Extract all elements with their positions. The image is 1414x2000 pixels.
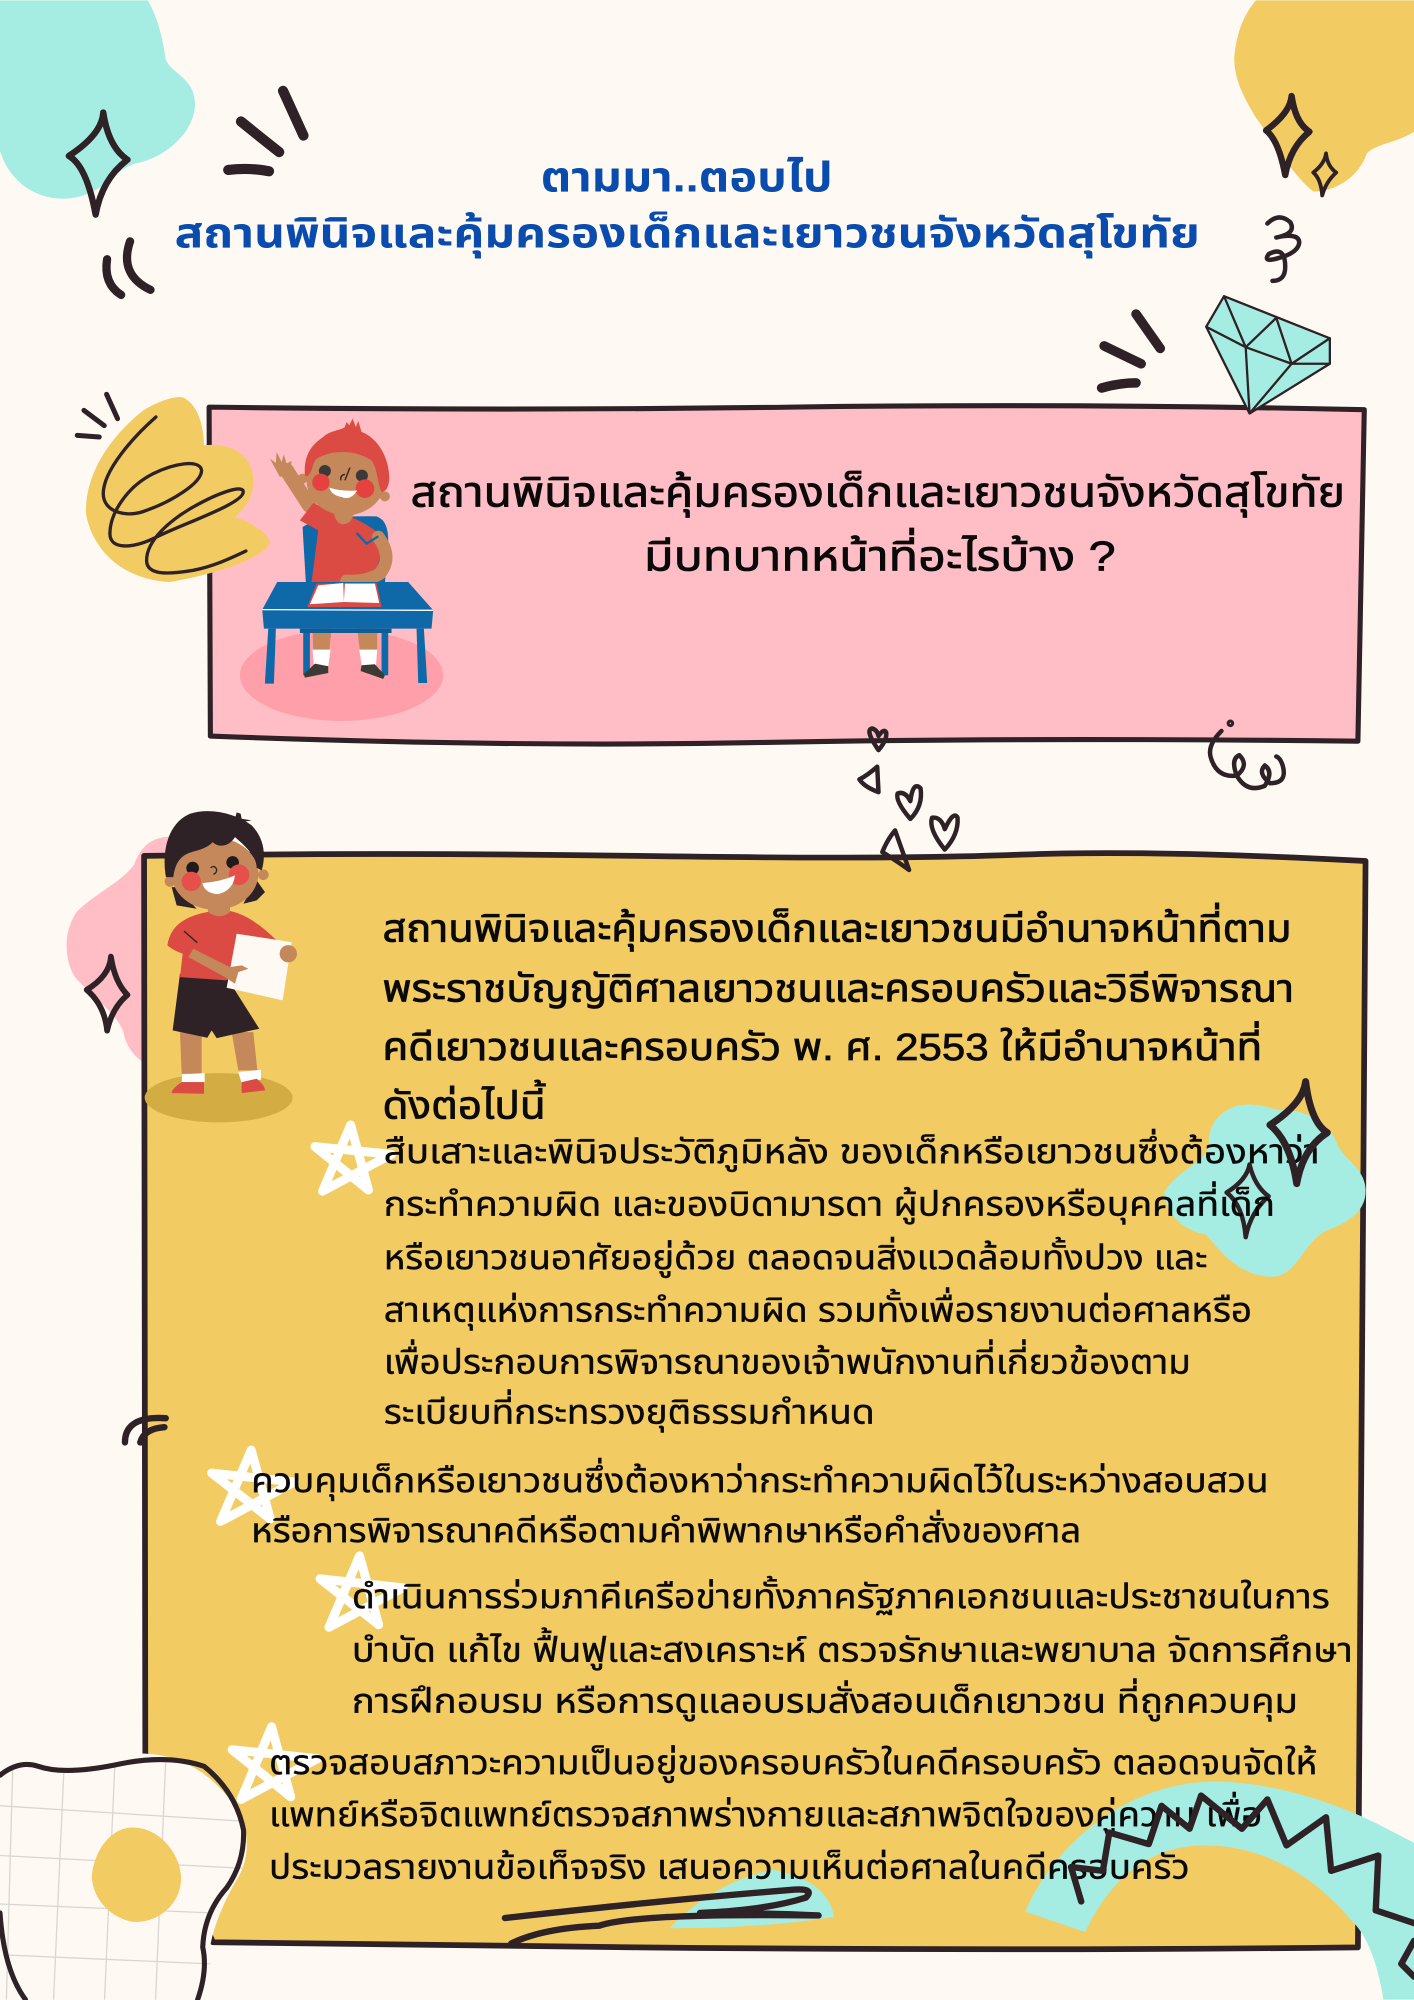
stars	[212, 1125, 403, 1799]
blob: yellow with scribble	[77, 394, 270, 582]
icon: sparkle top-left	[69, 113, 128, 215]
text block: duty 4	[269, 1744, 1317, 1886]
illustration: boy with paper	[145, 811, 297, 1122]
blob: teal in panel right	[1164, 1105, 1366, 1277]
text block: duty 4: แพทย์หรือจิตแพทย์ตรวจสภาพร่างกายและสภาพจิตใจของคู่ความ เพื่อ	[269, 1791, 1262, 1835]
text block: intro: ดังต่อไปนี้	[383, 1080, 546, 1128]
blob: yellow top-right	[1234, 0, 1414, 192]
panel: duties	[144, 853, 1366, 1949]
icon: curved marks left	[106, 241, 150, 295]
text block: duty 1	[384, 1128, 1320, 1432]
icon: curl under pink panel	[1210, 722, 1284, 788]
text block: duty 4: ประมวลรายงานข้อเท็จจริง เสนอความเห็นต่อศาลในคดีครอบครัว	[269, 1848, 1190, 1886]
icon: tick marks near diamond	[1102, 314, 1160, 388]
text block: duty 2	[251, 1457, 1269, 1550]
icon: hearts	[859, 728, 958, 870]
heading: question text	[411, 469, 1345, 579]
text block: duty 1: สืบเสาะและพินิจประวัติภูมิหลัง ของเด็กหรือเยาวชนซึ่งต้องหาว่า	[384, 1128, 1320, 1172]
illustration: boy at desk	[240, 419, 443, 721]
heading: question text: มีบทบาทหน้าที่อะไรบ้าง ?	[644, 527, 1116, 579]
heading: question text: สถานพินิจและคุ้มครองเด็กและเยาวชนจังหวัดสุโขทัย	[411, 469, 1345, 518]
text block: duty 3: บำบัด แก้ไข ฟื้นฟูและสงเคราะห์ ตรวจรักษาและพยาบาล จัดการศึกษา	[352, 1627, 1353, 1671]
text block: duty 1: สาเหตุแห่งการกระทำความผิด รวมทั้งเพื่อรายงานต่อศาลหรือ	[384, 1286, 1252, 1330]
text block: intro: สถานพินิจและคุ้มครองเด็กและเยาวชนมีอำนาจหน้าที่ตาม	[383, 902, 1292, 951]
text block: duty 1: ระเบียบที่กระทรวงยุติธรรมกำหนด	[384, 1388, 875, 1432]
text block: intro: คดีเยาวชนและครอบครัว พ. ศ. 2553 ให้มีอำนาจหน้าที่	[383, 1021, 1262, 1069]
text block: duty 2: หรือการพิจารณาคดีหรือตามคำพิพากษาหรือคำสั่งของศาล	[251, 1509, 1081, 1550]
icon: sparkle left of panel	[87, 957, 128, 1031]
text block: duty 2: ควบคุมเด็กหรือเยาวชนซึ่งต้องหาว่ากระทำความผิดไว้ในระหว่างสอบสวน	[251, 1457, 1269, 1501]
text block: duty 3	[352, 1575, 1353, 1722]
text block: duty 3: การฝึกอบรม หรือการดูแลอบรมสั่งสอนเด็กเยาวชน ที่ถูกควบคุม	[352, 1678, 1298, 1722]
text block: duty 3: ดำเนินการร่วมภาคีเครือข่ายทั้งภาครัฐภาคเอกชนและประชาชนในการ	[352, 1575, 1330, 1616]
title	[175, 154, 1200, 259]
icon: squiggle	[1267, 217, 1299, 281]
text block: intro: พระราชบัญญัติศาลเยาวชนและครอบครัวและวิธีพิจารณา	[383, 967, 1294, 1010]
text block: duty 1: หรือเยาวชนอาศัยอยู่ด้วย ตลอดจนสิ่งแวดล้อมทั้งปวง และ	[384, 1236, 1207, 1278]
blob: teal bottom small	[669, 1870, 834, 1928]
icon: curved mark	[125, 1418, 166, 1442]
icon: zigzag	[1071, 1796, 1414, 1977]
blob: teal top-left	[0, 0, 195, 199]
icon: sparkles top-right	[1266, 96, 1336, 195]
icon: tick marks top-left	[228, 91, 303, 171]
icon: scribble bottom	[505, 1889, 819, 1944]
icon: sparkle small on teal	[1227, 1164, 1269, 1237]
title: ตามมา..ตอบไป	[541, 154, 833, 201]
text block: duty 4: ตรวจสอบสภาวะความเป็นอยู่ของครอบครัวในคดีครอบครัว ตลอดจนจัดให้	[269, 1744, 1317, 1783]
text block: duty 1: เพื่อประกอบการพิจารณาของเจ้าพนักงานที่เกี่ยวข้องตาม	[384, 1339, 1191, 1382]
text block: duty 1: กระทำความผิด และของบิดามารดา ผู้ปกครองหรือบุคคลที่เด็ก	[384, 1180, 1275, 1224]
icon: diamond	[1206, 296, 1330, 413]
blob: pink behind boy	[67, 837, 191, 1066]
text block: intro	[383, 902, 1294, 1128]
blob: teal bottom-right arc	[1025, 1782, 1414, 2000]
panel: question	[209, 406, 1364, 744]
title: สถานพินิจและคุ้มครองเด็กและเยาวชนจังหวัดสุโขทัย	[175, 210, 1200, 259]
icon: sparkle big on teal	[1270, 1082, 1327, 1184]
illustration: egg note	[0, 1754, 247, 2000]
